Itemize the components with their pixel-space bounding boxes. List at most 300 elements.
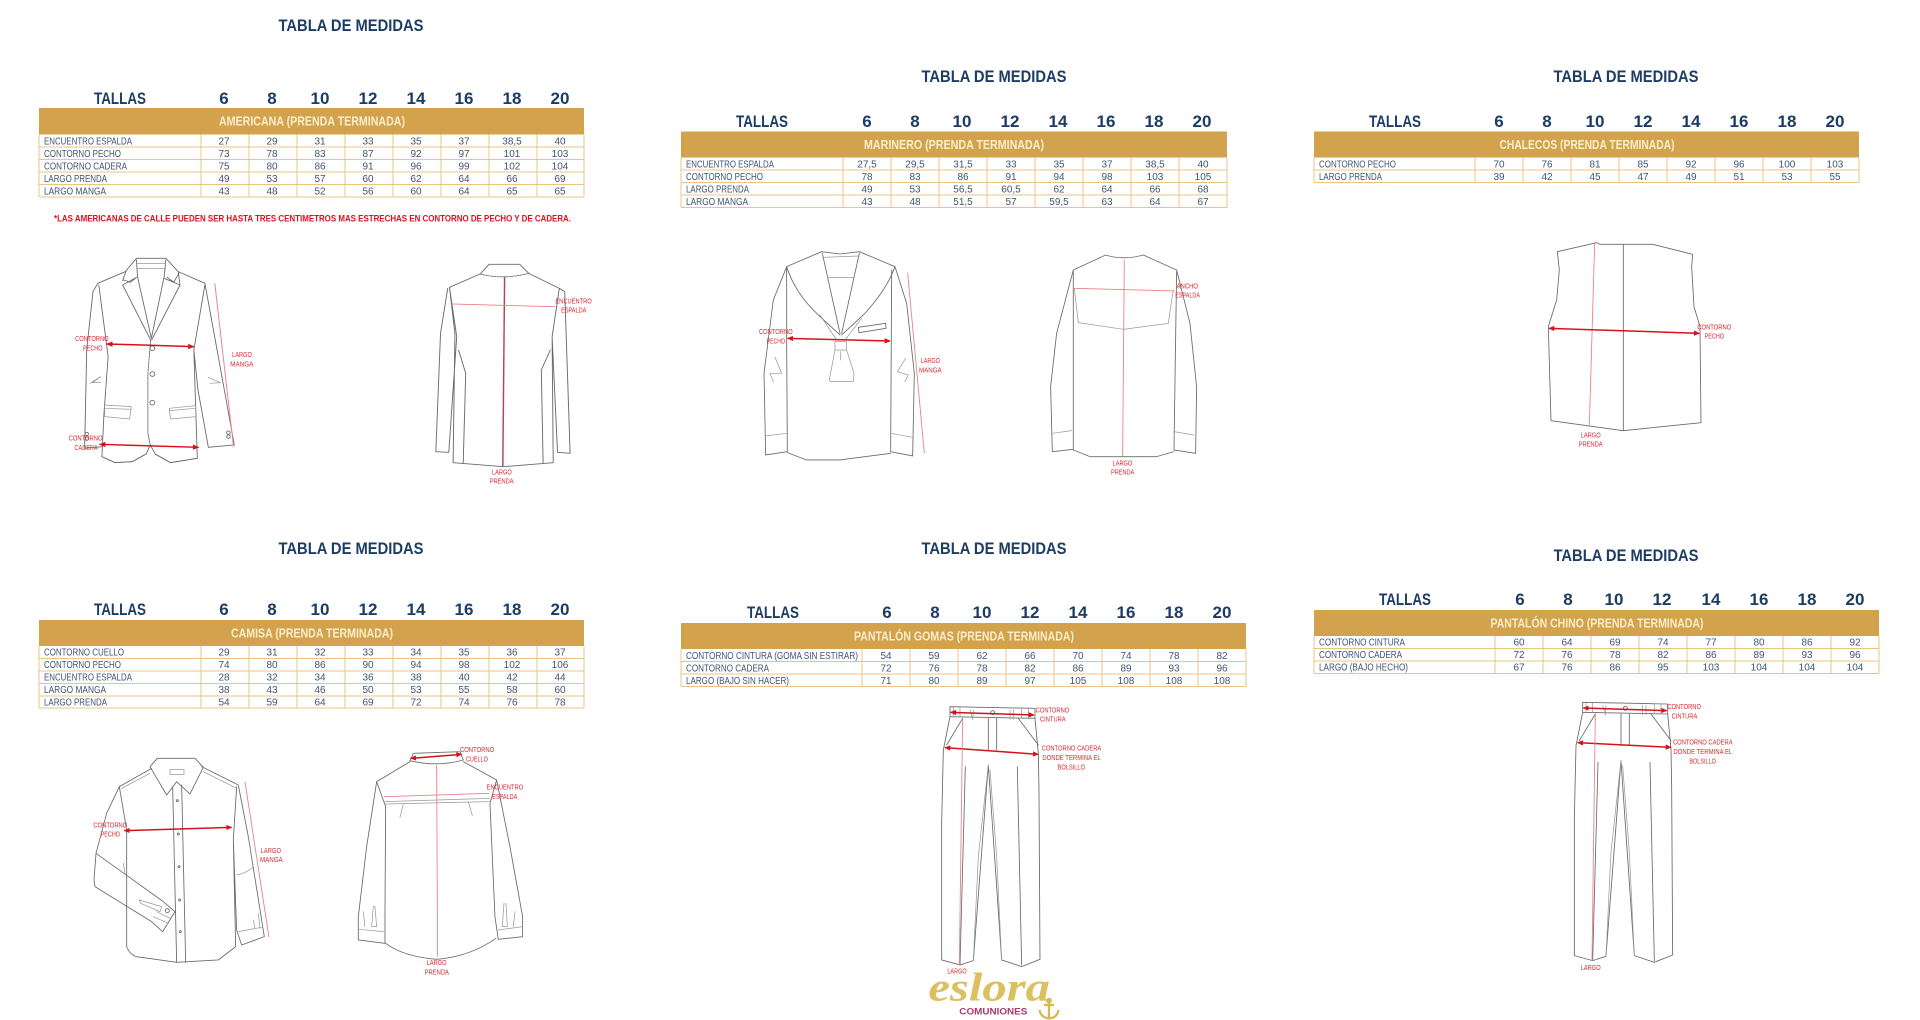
table grid and rows: 60 <box>554 685 566 696</box>
table grid and rows: CONTORNO CADERA <box>1319 650 1402 661</box>
size header: 12 <box>1634 112 1652 131</box>
table grid and rows: 89 <box>1753 650 1765 661</box>
table grid and rows: 37 <box>1101 160 1113 170</box>
vest drawing <box>1548 243 1701 431</box>
jacket back measures: ENCUENTRO <box>555 297 592 305</box>
gold band: MARINERO (PRENDA TERMINADA) <box>864 138 1044 152</box>
table grid and rows: 59 <box>266 698 278 708</box>
table grid and rows: 108 <box>1166 676 1183 687</box>
table grid and rows: 35 <box>458 648 470 658</box>
sailor back measures <box>1074 260 1200 477</box>
table grid and rows: 42 <box>506 672 518 684</box>
table grid and rows: 54 <box>218 698 230 708</box>
table grid and rows: CONTORNO CINTURA <box>1319 638 1405 648</box>
table grid and rows: 63 <box>1101 197 1113 208</box>
size header: 12 <box>1021 603 1039 622</box>
table grid and rows: 98 <box>1101 172 1113 183</box>
gold band <box>1314 132 1859 158</box>
table grid and rows: 53 <box>410 685 422 696</box>
table grid and rows: 86 <box>1072 664 1084 674</box>
table grid and rows: 82 <box>1657 650 1669 661</box>
table grid and rows: 87 <box>362 149 374 160</box>
table grid and rows: 64 <box>1101 184 1113 196</box>
table grid and rows: 86 <box>1609 662 1621 674</box>
sailor back measures: LARGO <box>1113 460 1133 467</box>
size header: TALLAS <box>747 603 799 622</box>
table grid and rows: 28 <box>218 672 230 684</box>
size header: 12 <box>359 89 377 108</box>
size header: 12 <box>1001 112 1019 131</box>
title: TABLA DE MEDIDAS <box>922 67 1066 86</box>
table grid and rows: 42 <box>1541 172 1553 183</box>
trousers measures: LARGO <box>1581 965 1601 972</box>
size header: 20 <box>1826 112 1844 131</box>
table grid and rows: 103 <box>1703 662 1720 674</box>
table grid and rows: 43 <box>861 197 873 208</box>
table grid and rows: 36 <box>362 672 374 684</box>
table grid and rows: 92 <box>1685 160 1697 170</box>
size header: TALLAS <box>94 89 146 108</box>
table grid and rows: 72 <box>410 698 422 708</box>
table grid and rows: 103 <box>1147 172 1164 183</box>
gold band: PANTALÓN GOMAS (PRENDA TERMINADA) <box>854 628 1074 644</box>
table grid and rows <box>39 646 584 708</box>
trousers measures: CONTORNO <box>1036 707 1070 714</box>
table grid and rows: 64 <box>458 174 470 185</box>
size header: 14 <box>407 89 426 108</box>
logo: eslora comuniones: eslora <box>928 965 1050 1010</box>
table grid and rows: 43 <box>266 685 278 696</box>
table grid and rows: 40 <box>554 136 566 148</box>
size header: 6 <box>219 600 229 619</box>
trousers measures: LARGO <box>947 968 967 975</box>
table grid and rows: 45 <box>1589 172 1601 183</box>
red note: *LAS AMERICANAS DE CALLE PUEDEN SER HASTA TRES CENTIMETROS MAS ESTRECHAS EN CONTORNO DE PECHO Y DE CADERA. <box>54 214 571 224</box>
trousers measures: CONTORNO <box>1667 704 1701 711</box>
trousers measures: CONTORNO CADERA <box>1042 746 1102 753</box>
trousers measures: DONDE TERMINA EL <box>1673 749 1732 756</box>
table grid and rows: 65 <box>506 186 518 198</box>
table grid and rows: 62 <box>410 174 422 185</box>
table grid and rows: 33 <box>362 136 374 148</box>
jacket front measures: MANGA <box>230 360 253 368</box>
table grid and rows: LARGO PRENDA <box>44 174 107 185</box>
table grid and rows: 78 <box>266 149 278 160</box>
table grid and rows: 92 <box>410 149 422 160</box>
shirt back measures: CONTORNO <box>460 747 495 754</box>
table grid and rows: 82 <box>1024 664 1036 674</box>
vest measures: CONTORNO <box>1697 324 1732 331</box>
size header: 6 <box>219 89 229 108</box>
gold band <box>39 620 584 646</box>
table grid and rows: 78 <box>1609 650 1621 661</box>
table grid and rows: 49 <box>1685 172 1697 183</box>
table grid and rows: 67 <box>1197 197 1209 208</box>
trousers measures: CINTURA <box>1672 714 1698 721</box>
title: TABLA DE MEDIDAS <box>1554 67 1698 86</box>
table grid and rows: 47 <box>1637 172 1649 183</box>
gold band <box>1314 610 1879 636</box>
trousers measures <box>1578 704 1733 972</box>
table grid and rows: 43 <box>218 186 230 198</box>
table grid and rows: 74 <box>1120 651 1132 662</box>
size header: 20 <box>1193 112 1211 131</box>
table grid and rows: 56 <box>362 186 374 198</box>
vest measures <box>1549 243 1732 449</box>
vest measures: PECHO <box>1705 333 1724 340</box>
table grid and rows: 91 <box>1005 172 1017 183</box>
table grid and rows: 105 <box>1070 676 1087 687</box>
table grid and rows: 33 <box>362 648 374 658</box>
table grid and rows: 75 <box>218 162 230 172</box>
table grid and rows: 57 <box>314 174 326 185</box>
size header: 16 <box>455 89 473 108</box>
table grid and rows: 78 <box>554 698 566 708</box>
table grid and rows: 64 <box>1561 638 1573 648</box>
size header: 16 <box>1750 590 1768 609</box>
table grid and rows: 69 <box>362 698 374 708</box>
table grid and rows: 60 <box>362 174 374 185</box>
table grid and rows: 108 <box>1118 676 1135 687</box>
size header: 10 <box>311 89 329 108</box>
shirt front measures <box>93 782 283 937</box>
sailor back measures: PRENDA <box>1111 470 1135 477</box>
table grid and rows: 66 <box>1024 651 1036 662</box>
table grid and rows: 70 <box>1072 651 1084 662</box>
table grid and rows: 67 <box>1513 662 1525 674</box>
table grid and rows <box>681 649 1246 687</box>
table grid and rows: 59,5 <box>1049 197 1069 208</box>
table grid and rows: 86 <box>1705 650 1717 661</box>
table grid and rows: 27,5 <box>857 160 877 170</box>
size header: 10 <box>311 600 329 619</box>
table grid and rows: 70 <box>1493 160 1505 170</box>
sailor front measures: PECHO <box>767 338 785 345</box>
table grid and rows: 58 <box>506 685 518 696</box>
jacket back measures <box>451 277 592 485</box>
table grid and rows: 40 <box>1197 160 1209 170</box>
table grid and rows: 62 <box>976 651 988 662</box>
size header <box>94 600 569 619</box>
garment diagram: vest <box>1548 243 1732 449</box>
table grid and rows: CONTORNO PECHO <box>44 660 121 671</box>
table grid and rows: 72 <box>880 664 892 674</box>
table grid and rows: 31 <box>266 648 278 658</box>
sailor front measures <box>759 273 942 453</box>
table grid and rows: 86 <box>957 172 969 183</box>
size header: 20 <box>551 600 569 619</box>
table grid and rows: 66 <box>506 174 518 185</box>
title: TABLA DE MEDIDAS <box>278 539 424 558</box>
table grid and rows: 36 <box>506 648 518 658</box>
panel: chalecos <box>1314 67 1859 449</box>
panel: pantalon gomas <box>681 539 1246 1018</box>
size header: 12 <box>1653 590 1671 609</box>
table grid and rows: 103 <box>1827 160 1844 170</box>
shirt front drawing <box>94 758 264 962</box>
jacket front drawing <box>85 258 234 463</box>
table grid and rows: 38 <box>410 672 422 684</box>
size header: 20 <box>1846 590 1864 609</box>
table grid and rows: 96 <box>1216 664 1228 674</box>
table grid and rows: 66 <box>1149 184 1161 196</box>
size header: 18 <box>503 600 521 619</box>
size header: 18 <box>503 89 521 108</box>
size header: TALLAS <box>736 112 788 131</box>
table grid and rows: 101 <box>504 149 521 160</box>
table grid and rows: 86 <box>314 162 326 172</box>
table grid and rows: 56,5 <box>953 184 973 196</box>
jacket front measures <box>69 283 253 452</box>
table grid and rows: 90 <box>362 660 374 671</box>
table grid and rows: 103 <box>552 149 569 160</box>
table grid and rows: 106 <box>552 660 569 671</box>
table grid and rows: CONTORNO PECHO <box>1319 160 1396 170</box>
gold band <box>681 623 1246 649</box>
shirt back drawing <box>358 752 523 959</box>
table grid and rows: 76 <box>1541 160 1553 170</box>
title: TABLA DE MEDIDAS <box>1554 546 1698 565</box>
size header: 14 <box>1702 590 1721 609</box>
table grid and rows: 78 <box>1168 651 1180 662</box>
table grid and rows: 96 <box>1733 160 1745 170</box>
table grid and rows: 82 <box>1216 651 1228 662</box>
table grid and rows: 64 <box>1149 197 1161 208</box>
trousers measures: BOLSILLO <box>1058 764 1085 771</box>
table grid and rows: 51,5 <box>953 197 973 208</box>
trousers measures: DONDE TERMINA EL <box>1042 755 1101 762</box>
size header: 10 <box>973 603 991 622</box>
size header: 6 <box>882 603 892 622</box>
table grid and rows <box>39 134 584 198</box>
garment diagram: trousers chino <box>1574 702 1733 972</box>
gold band: CAMISA (PRENDA TERMINADA) <box>231 626 393 640</box>
size header: 12 <box>359 600 377 619</box>
size header: 8 <box>267 600 277 619</box>
sailor front measures: MANGA <box>919 367 942 374</box>
panel: americana <box>39 16 592 485</box>
trousers drawing <box>1574 702 1673 962</box>
trousers measures: CONTORNO CADERA <box>1673 740 1733 747</box>
table grid and rows: 92 <box>1849 638 1861 648</box>
table grid and rows: 95 <box>1657 662 1669 674</box>
size header: 18 <box>1798 590 1816 609</box>
size header: 8 <box>267 89 277 108</box>
size header <box>747 603 1231 622</box>
table grid and rows: 85 <box>1637 160 1649 170</box>
table grid and rows: 96 <box>410 162 422 172</box>
table grid and rows: 69 <box>554 174 566 185</box>
table grid and rows: 74 <box>218 660 230 671</box>
shirt back measures: CUELLO <box>466 756 488 763</box>
table grid and rows: 53 <box>1781 172 1793 183</box>
size header <box>736 112 1211 131</box>
title: TABLA DE MEDIDAS <box>922 539 1066 558</box>
table grid and rows: 49 <box>218 174 230 185</box>
size header: TALLAS <box>1379 590 1431 609</box>
table grid and rows: 33 <box>1005 160 1017 170</box>
table grid and rows: 60 <box>1513 638 1525 648</box>
size header: 14 <box>1682 112 1701 131</box>
table grid and rows: 32 <box>266 672 278 684</box>
table grid and rows: 73 <box>218 149 230 160</box>
shirt back measures <box>384 747 524 976</box>
garment diagrams: jacket front and back <box>69 258 592 485</box>
panel: marinero <box>681 67 1227 477</box>
table grid and rows: 91 <box>362 162 374 172</box>
table grid and rows: 49 <box>861 184 873 196</box>
table grid and rows: LARGO MANGA <box>44 186 106 198</box>
table grid and rows: 81 <box>1589 160 1601 170</box>
size header: TALLAS <box>94 600 146 619</box>
logo: eslora comuniones <box>928 965 1059 1018</box>
table grid and rows: 96 <box>1849 650 1861 661</box>
jacket back measures: ESPALDA <box>561 306 586 315</box>
table grid and rows: 86 <box>1801 638 1813 648</box>
table grid and rows: 37 <box>458 136 470 148</box>
table grid and rows: 78 <box>976 664 988 674</box>
table grid and rows: 60 <box>410 186 422 198</box>
table grid and rows: 105 <box>1195 172 1212 183</box>
table grid and rows: 94 <box>410 660 422 671</box>
table grid and rows: 83 <box>314 149 326 160</box>
size header: 8 <box>910 112 920 131</box>
table grid and rows: 27 <box>218 136 230 148</box>
jacket front measures: CONTORNO <box>75 334 109 343</box>
garment diagrams: sailor top front and back <box>759 252 1200 477</box>
size header: 18 <box>1145 112 1163 131</box>
table grid and rows: 97 <box>1024 676 1036 687</box>
size header: 8 <box>1542 112 1552 131</box>
table grid and rows: 46 <box>314 685 326 696</box>
shirt back measures: ENCUENTRO <box>487 785 524 792</box>
table grid and rows: 76 <box>1561 662 1573 674</box>
trousers drawing <box>942 707 1040 967</box>
table grid and rows: 80 <box>1753 638 1765 648</box>
table grid and rows: 102 <box>504 162 521 172</box>
table grid and rows: 80 <box>928 676 940 687</box>
table grid and rows: 64 <box>458 186 470 198</box>
table grid and rows: 34 <box>410 648 422 658</box>
jacket front measures: PECHO <box>83 344 103 352</box>
shirt back measures: LARGO <box>427 960 447 967</box>
sailor front measures: CONTORNO <box>759 329 793 336</box>
vest measures: PRENDA <box>1579 442 1603 449</box>
title: TABLA DE MEDIDAS <box>278 16 424 35</box>
size header: 14 <box>407 600 426 619</box>
gold band <box>39 108 584 134</box>
table grid and rows <box>681 158 1227 208</box>
table grid and rows: 62 <box>1053 184 1065 196</box>
logo: eslora comuniones: COMUNIONES <box>959 1007 1027 1017</box>
table grid and rows: 104 <box>1799 662 1816 674</box>
jacket back measures: LARGO <box>492 468 512 476</box>
sailor front drawing <box>764 252 914 460</box>
gold band: PANTALÓN CHINO (PRENDA TERMINADA) <box>1490 616 1704 630</box>
table grid and rows: ENCUENTRO ESPALDA <box>44 672 132 684</box>
table grid and rows: LARGO PRENDA <box>686 184 749 196</box>
table grid and rows: 29 <box>266 136 278 148</box>
trousers measures: BOLSILLO <box>1689 759 1716 766</box>
table grid and rows: 76 <box>1561 650 1573 661</box>
sailor back drawing <box>1051 255 1197 457</box>
jacket front measures: LARGO <box>232 350 252 359</box>
table grid and rows: 93 <box>1168 664 1180 674</box>
jacket back drawing <box>436 264 570 467</box>
table grid and rows: 104 <box>1847 662 1864 674</box>
table grid and rows: LARGO MANGA <box>686 197 748 208</box>
table grid and rows: 108 <box>1214 676 1231 687</box>
table grid and rows: 39 <box>1493 172 1505 183</box>
sailor back measures: ESPALDA <box>1175 293 1200 300</box>
table grid and rows: 72 <box>1513 650 1525 661</box>
table grid and rows: 52 <box>314 186 326 198</box>
table grid and rows: 50 <box>362 685 374 696</box>
size header: 6 <box>1515 590 1525 609</box>
table grid and rows: 48 <box>909 197 921 208</box>
table grid and rows: 69 <box>1609 638 1621 648</box>
vest measures: LARGO <box>1581 432 1601 439</box>
table grid and rows: ENCUENTRO ESPALDA <box>686 160 774 170</box>
size header: 16 <box>1117 603 1135 622</box>
trousers measures <box>945 707 1102 975</box>
table grid and rows: 71 <box>880 676 892 687</box>
size header: 8 <box>930 603 940 622</box>
shirt front measures: MANGA <box>260 857 283 864</box>
gold band: AMERICANA (PRENDA TERMINADA) <box>219 114 405 128</box>
shirt back measures: PRENDA <box>425 969 449 976</box>
table grid and rows: 34 <box>314 672 326 684</box>
size header: 20 <box>1213 603 1231 622</box>
size header: 6 <box>1494 112 1504 131</box>
table grid and rows: 76 <box>928 664 940 674</box>
jacket front measures: CADERA <box>74 443 98 452</box>
table grid and rows: 102 <box>504 660 521 671</box>
size header: 20 <box>551 89 569 108</box>
table grid and rows: 80 <box>266 162 278 172</box>
trousers measures: CINTURA <box>1040 716 1066 723</box>
size header <box>1369 112 1844 131</box>
panel: pantalon chino <box>1314 546 1879 972</box>
table grid and rows: 89 <box>1120 664 1132 674</box>
table grid and rows: LARGO PRENDA <box>1319 172 1382 183</box>
table grid and rows: 48 <box>266 186 278 198</box>
table grid and rows: 57 <box>1005 197 1017 208</box>
size header <box>94 89 569 108</box>
table grid and rows: 55 <box>458 685 470 696</box>
table grid and rows: 31,5 <box>953 160 973 170</box>
panel: camisa <box>39 539 584 976</box>
size header: 16 <box>1730 112 1748 131</box>
table grid and rows: ENCUENTRO ESPALDA <box>44 136 132 148</box>
table grid and rows: 53 <box>909 184 921 196</box>
table grid and rows: 55 <box>1829 172 1841 183</box>
table grid and rows: 86 <box>314 660 326 671</box>
garment diagrams: shirt front and back <box>93 747 524 976</box>
table grid and rows: 53 <box>266 174 278 185</box>
table grid and rows: 89 <box>976 676 988 687</box>
sailor back measures: ANCHO <box>1177 283 1198 290</box>
table grid and rows: 29 <box>218 648 230 658</box>
size header: 8 <box>1563 590 1573 609</box>
table grid and rows: 29,5 <box>905 160 925 170</box>
table grid and rows: 78 <box>861 172 873 183</box>
table grid and rows: LARGO (BAJO HECHO) <box>1319 662 1408 674</box>
table grid and rows: LARGO PRENDA <box>44 698 107 708</box>
shirt front measures: LARGO <box>261 848 281 855</box>
size header: 18 <box>1778 112 1796 131</box>
table grid and rows <box>1314 636 1879 674</box>
